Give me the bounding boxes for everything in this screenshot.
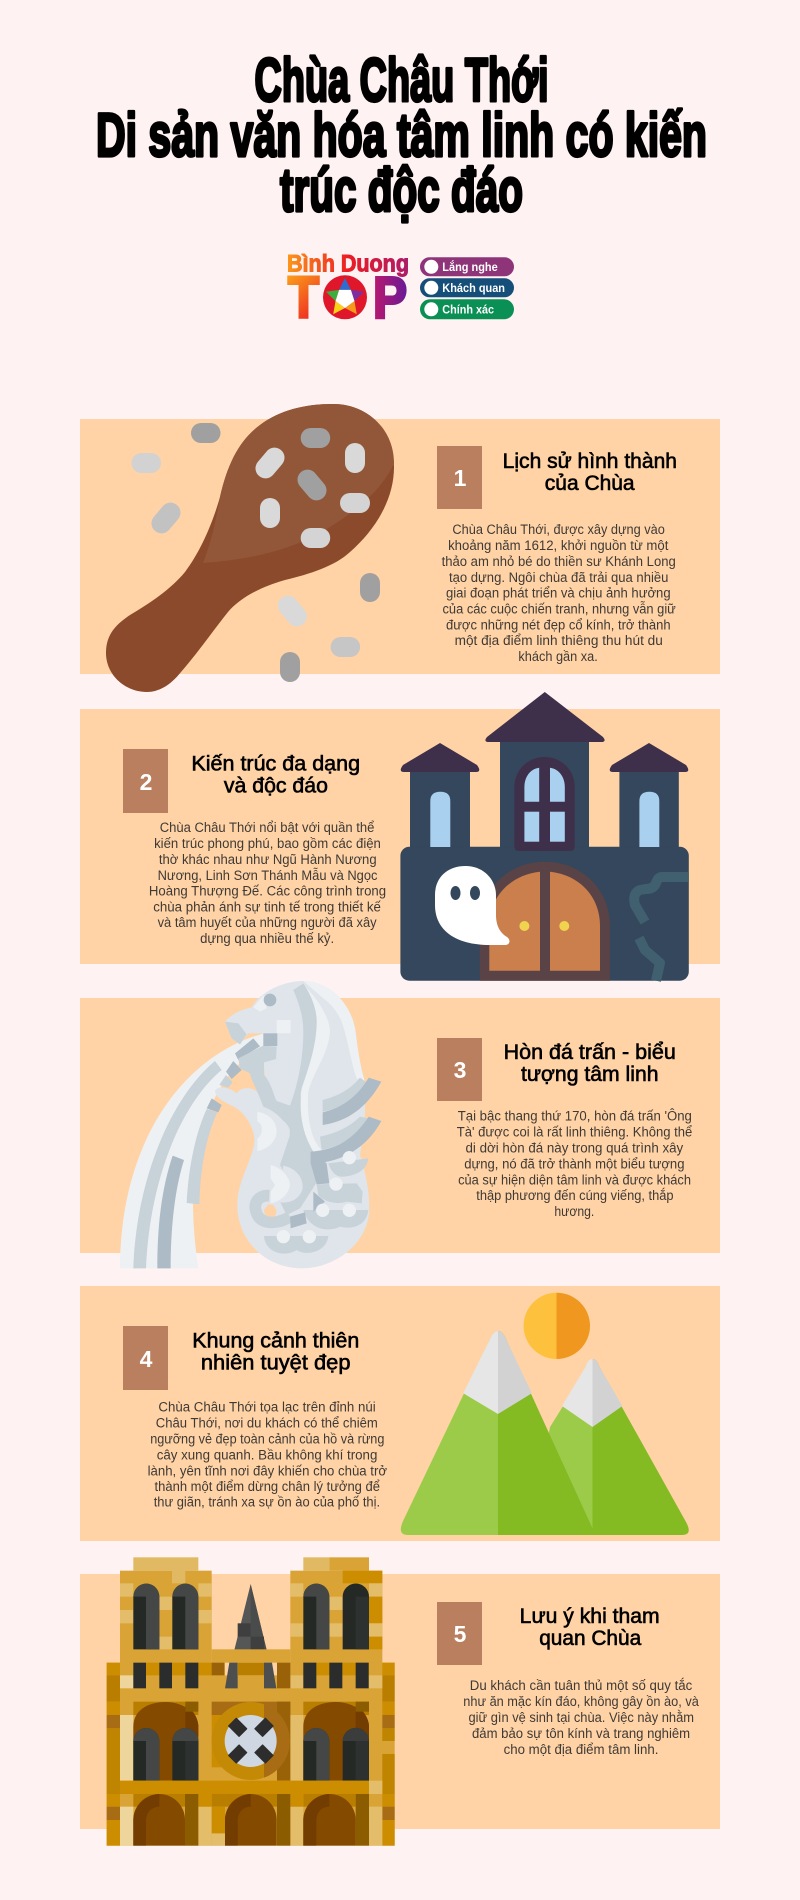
body text 4: Châu Thới, nơi du khách có thể chiêm	[156, 1416, 378, 1430]
icon: cathedral	[107, 1557, 395, 1846]
body text 2	[149, 820, 386, 946]
number badge 3	[437, 1038, 482, 1101]
body text 5: như ăn mặc kín đáo, không gây ồn ào, và	[463, 1694, 699, 1709]
heading 2	[191, 753, 360, 798]
heading 4: nhiên tuyệt đẹp	[201, 1352, 350, 1375]
body text 4: lành, yên tĩnh nơi đây khiến cho chùa trở	[148, 1463, 387, 1478]
body text 1: thảo am nhỏ bé do thiền sư Khánh Long	[442, 554, 676, 569]
heading 1: của Chùa	[545, 472, 635, 495]
body text 2: chùa phản ánh sự tinh tế trong thiết kế	[153, 900, 381, 914]
number badge 5: 5	[454, 1621, 467, 1647]
heading 2: và độc đáo	[224, 775, 328, 798]
heading 1	[503, 450, 677, 495]
body text 1: khách gần xa.	[518, 649, 598, 664]
panel 1: history	[80, 404, 720, 692]
body text 3: dựng, nó đã trở thành một biểu tượng	[464, 1156, 684, 1171]
heading 1: Lịch sử hình thành	[503, 450, 677, 473]
body text 3: Tà' được coi là rất linh thiêng. Không thể	[457, 1124, 692, 1140]
number badge 1	[437, 446, 482, 509]
heading 4	[192, 1330, 359, 1375]
body text 2: dựng qua nhiều thế kỷ.	[200, 931, 334, 946]
body text 4: ngưỡng vẻ đẹp toàn cảnh của hồ và rừng	[150, 1432, 384, 1446]
body text 1: của các cuộc chiến tranh, nhưng vẫn giữ	[442, 602, 676, 616]
body text 1: được những nét đẹp cổ kính, trở thành	[446, 618, 671, 632]
body text 4: thành một điểm dừng chân lý tưởng để	[154, 1479, 380, 1494]
body text 1: tạo dựng. Ngôi chùa đã trải qua nhiều	[449, 570, 668, 585]
title: trúc độc đáo	[280, 156, 523, 224]
logo: Bình Dương TOP: Khách quan	[442, 281, 505, 295]
body text 5: đảm bảo sự tôn kính và trang nghiêm	[472, 1726, 690, 1741]
body text 1: khoảng năm 1612, khởi nguồn từ một	[448, 538, 669, 553]
body text 2: và tâm huyết của những người đã xây	[158, 915, 377, 930]
icon: merlion statue	[120, 981, 381, 1268]
logo: Bình Dương TOP: P	[373, 266, 407, 330]
body text 4	[148, 1400, 387, 1510]
title: Chùa Châu Thới	[254, 46, 548, 114]
body text 4: cây xung quanh. Bầu không khí trong	[157, 1447, 377, 1462]
number badge 1: 1	[454, 465, 467, 491]
body text 3: thập phương đến cúng viếng, thắp	[476, 1188, 674, 1203]
logo: Bình Dương TOP: Bình Duong	[287, 250, 409, 278]
title	[96, 46, 707, 224]
logo: Bình Dương TOP: T	[288, 266, 319, 330]
body text 2: Hoàng Thượng Đế. Các công trình trong	[149, 884, 386, 898]
logo: Bình Dương TOP: Lắng nghe	[442, 259, 498, 274]
body text 3: của sự hiện diện tâm linh và được khách	[458, 1172, 691, 1187]
body text 3	[457, 1109, 692, 1219]
body text 2: thờ khác nhau như Ngũ Hành Nương	[159, 852, 377, 867]
heading 2: Kiến trúc đa dạng	[191, 753, 360, 776]
number badge 2	[123, 749, 168, 813]
body text 5: cho một địa điểm tâm linh.	[504, 1742, 658, 1757]
icon: mountains and sun	[401, 1293, 689, 1535]
number badge 4: 4	[140, 1346, 153, 1372]
panel 4: scenery	[80, 1286, 720, 1541]
body text 5: Du khách cần tuân thủ một số quy tắc	[470, 1678, 693, 1693]
number badge 3: 3	[454, 1057, 466, 1083]
body text 4: thư giãn, tránh xa sự ồn ào của phố thị.	[154, 1495, 380, 1510]
body text 2: kiến trúc phong phú, bao gồm các điện	[154, 836, 381, 851]
logo: Bình Dương TOP: Chính xác	[442, 302, 494, 316]
heading 3	[504, 1041, 676, 1086]
body text 3: hương.	[554, 1204, 594, 1219]
body text 1: Chùa Châu Thới, được xây dựng vào	[452, 522, 665, 537]
heading 5: quan Chùa	[539, 1627, 642, 1650]
heading 5: Lưu ý khi tham	[520, 1605, 660, 1628]
icon: drumstick spoon with pills	[106, 404, 394, 692]
number badge 4	[123, 1326, 168, 1390]
body text 1: giai đoạn phát triển và chịu ảnh hưởng	[446, 586, 671, 600]
number badge 2: 2	[140, 769, 152, 795]
panel 5: visitor notes	[80, 1557, 720, 1846]
heading 5	[520, 1605, 660, 1650]
body text 1: một địa điểm linh thiêng thu hút du	[455, 633, 663, 648]
heading 3: tượng tâm linh	[521, 1063, 658, 1086]
body text 4: Chùa Châu Thới tọa lạc trên đỉnh núi	[158, 1400, 376, 1415]
body text 5: giữ gìn vệ sinh tại chùa. Việc này nhằm	[468, 1710, 694, 1725]
body text 2: Nương, Linh Sơn Thánh Mẫu và Ngọc	[158, 868, 378, 883]
logo: Bình Dương TOP	[287, 250, 514, 330]
panel 3: guardian stone	[80, 981, 720, 1268]
body text 2: Chùa Châu Thới nổi bật với quần thể	[160, 820, 374, 835]
body text 5	[463, 1678, 699, 1757]
icon: haunted castle with ghost	[400, 692, 689, 981]
body text 3: di dời hòn đá này trong quá trình xây	[466, 1140, 683, 1156]
heading 3: Hòn đá trấn - biểu	[504, 1041, 676, 1064]
panel 2: architecture	[80, 692, 720, 981]
number badge 5	[437, 1602, 482, 1665]
body text 1	[442, 522, 676, 664]
heading 4: Khung cảnh thiên	[192, 1330, 359, 1353]
body text 3: Tại bậc thang thứ 170, hòn đá trấn 'Ông	[458, 1109, 692, 1124]
